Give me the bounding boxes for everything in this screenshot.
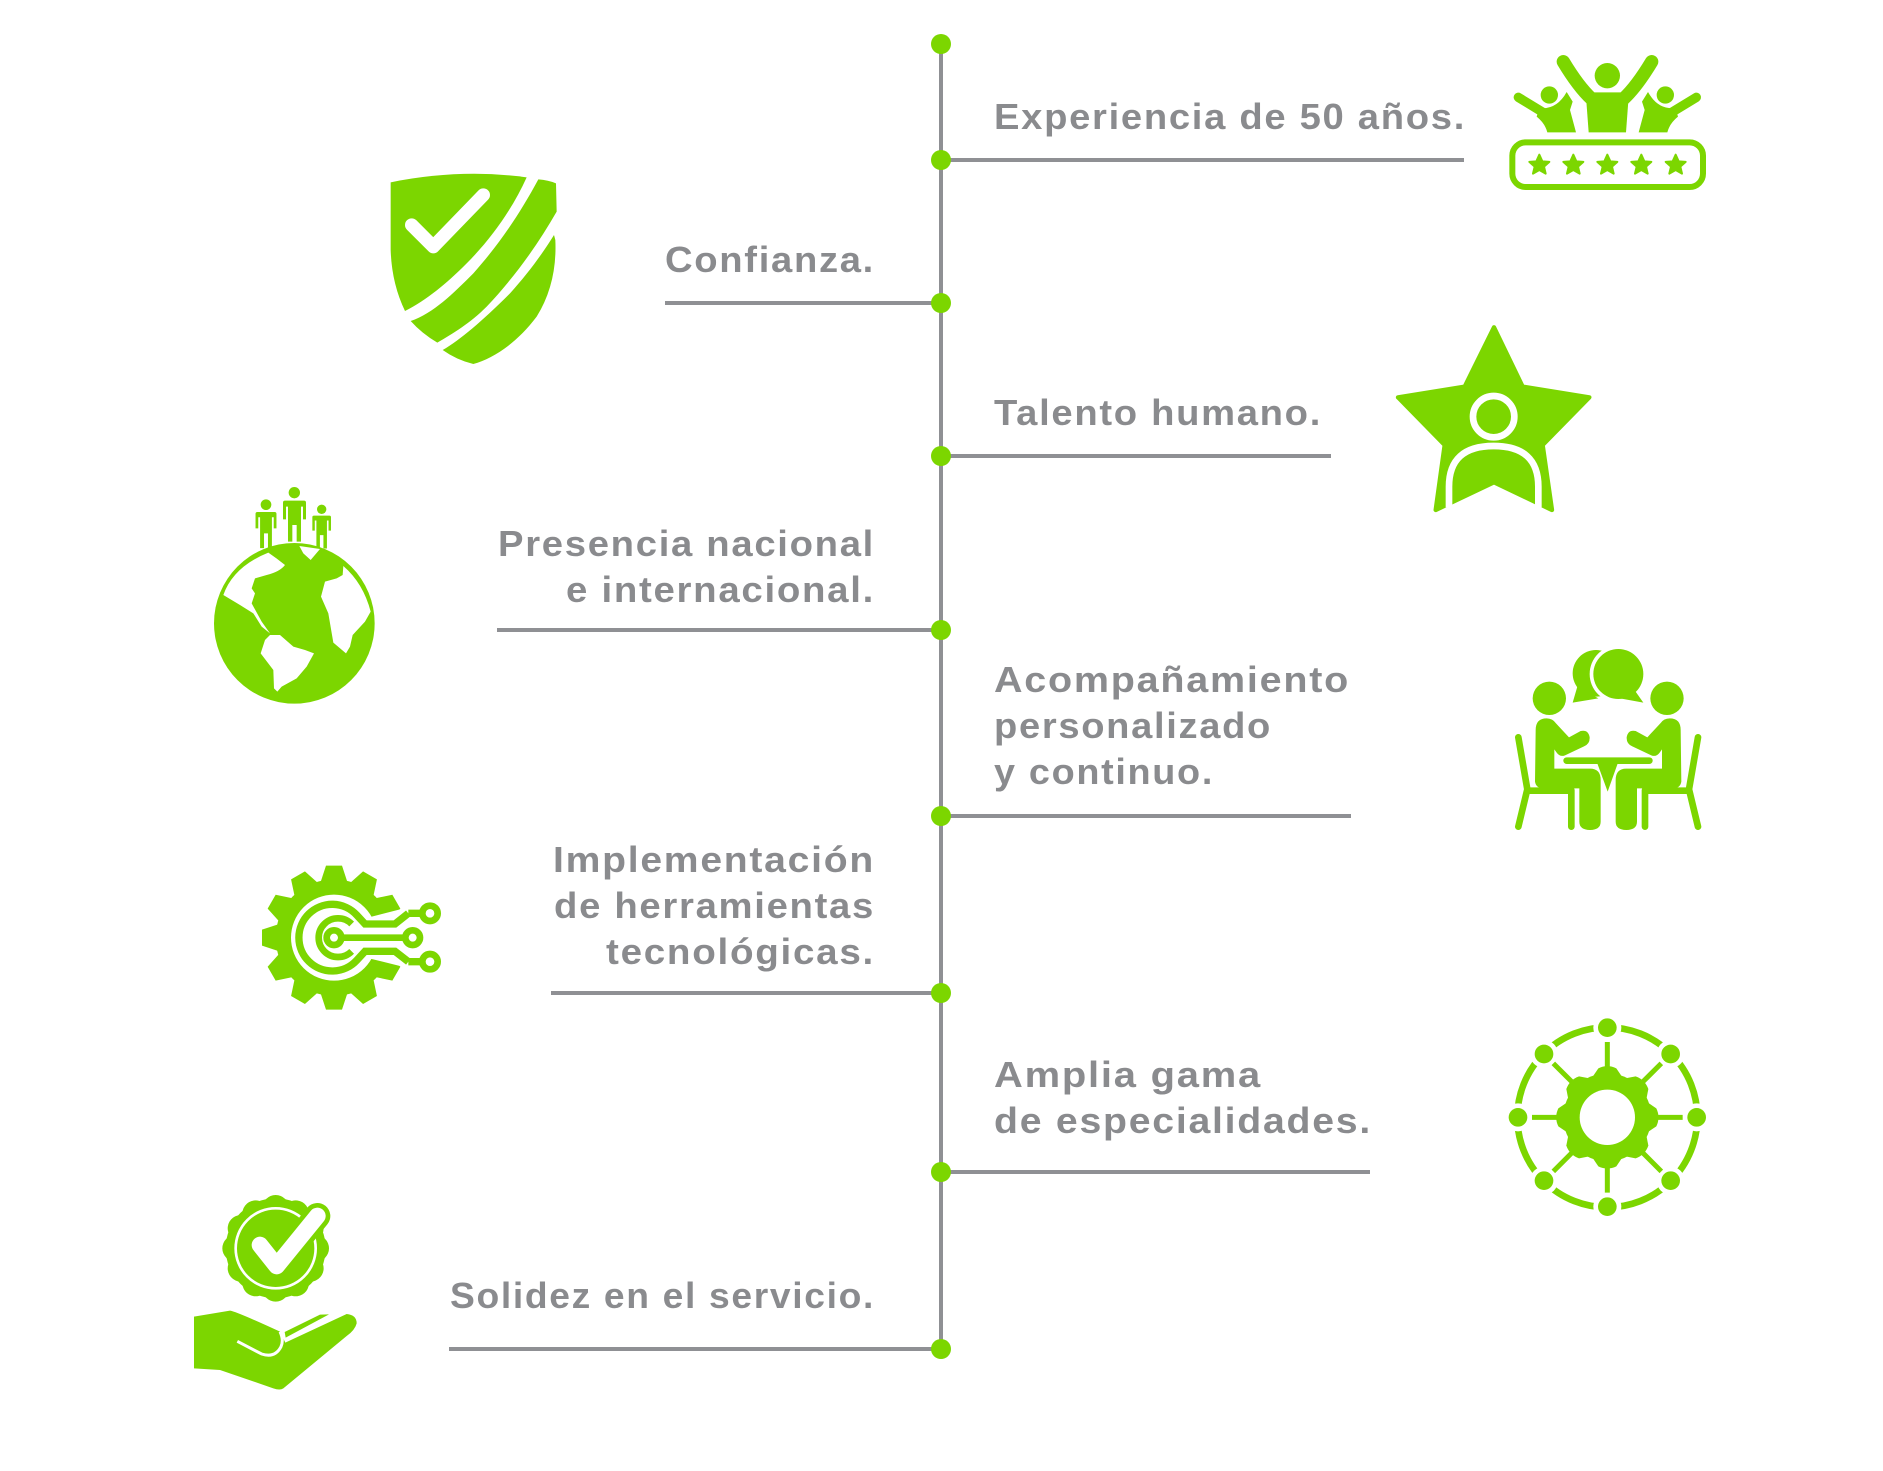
icon: cheering people with five stars	[1512, 62, 1703, 187]
item: Talento humano	[931, 392, 1331, 466]
item: Implementación de herramientas tecnológicas: Implementación	[553, 839, 875, 880]
item: Confianza: Confianza.	[665, 239, 875, 280]
icon: star with person	[1398, 327, 1589, 510]
item: Talento humano: Talento humano.	[994, 392, 1322, 433]
item: Presencia nacional e internacional: e internacional.	[566, 569, 875, 610]
icon: network gear	[1504, 1014, 1711, 1221]
item: Acompañamiento personalizado y continuo: Acompañamiento	[994, 659, 1350, 700]
item: Acompañamiento personalizado y continuo: y continuo.	[994, 751, 1214, 792]
item: Amplia gama de especialidades: Amplia gama	[994, 1054, 1262, 1095]
icon: hand holding approval badge	[194, 1195, 357, 1389]
icon: two people talking at a table	[1518, 645, 1698, 830]
item: Amplia gama de especialidades	[931, 1054, 1372, 1182]
item: Presencia nacional e internacional	[497, 523, 951, 640]
top timeline dot	[931, 34, 951, 54]
icon: shield with check	[391, 174, 557, 364]
item: Solidez en el servicio	[449, 1275, 951, 1359]
item: Acompañamiento personalizado y continuo: personalizado	[994, 705, 1272, 746]
icon: globe with three people	[214, 487, 375, 704]
item: Experiencia de 50 años	[931, 96, 1466, 170]
item: Presencia nacional e internacional: Presencia nacional	[498, 523, 875, 564]
item: Solidez en el servicio: Solidez en el servicio.	[450, 1275, 875, 1316]
item: Confianza	[665, 239, 951, 313]
item: Amplia gama de especialidades: de especialidades.	[994, 1100, 1372, 1141]
item: Implementación de herramientas tecnológicas: tecnológicas.	[606, 931, 875, 972]
icon: gear with circuit	[262, 866, 438, 1010]
item: Implementación de herramientas tecnológicas: de herramientas	[554, 885, 875, 926]
item: Experiencia de 50 años: Experiencia de 50 años.	[994, 96, 1466, 137]
item: Acompañamiento personalizado y continuo	[931, 659, 1351, 826]
item: Implementación de herramientas tecnológicas	[551, 839, 951, 1003]
